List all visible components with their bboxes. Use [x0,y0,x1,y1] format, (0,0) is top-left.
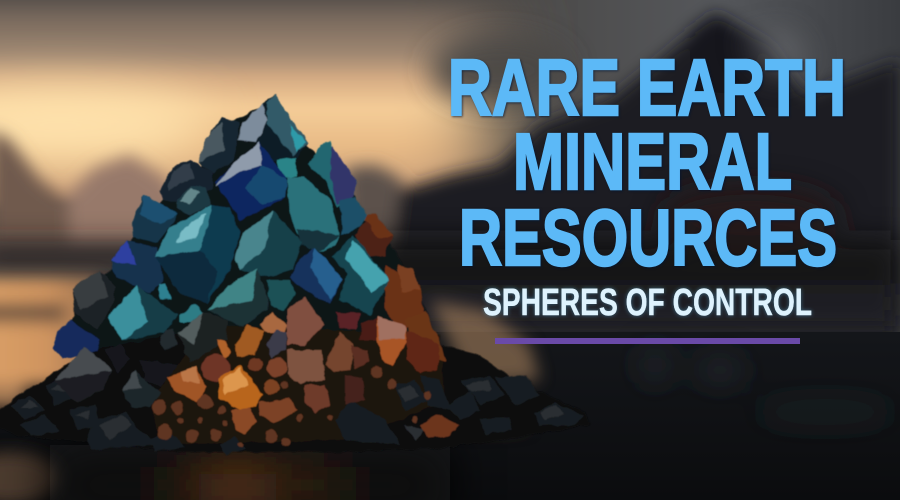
rock: dark grey left [72,270,115,330]
rock: large teal right of centre [287,177,340,252]
rock: teal right with violet side [308,142,356,208]
rock: mid teal [207,268,268,327]
rock: blue faceted [290,247,343,303]
rock: bright teal right [332,235,390,315]
black rock rubble base [0,325,590,455]
rock: blue left [132,195,178,243]
rock: dark grey foreground [55,347,112,403]
rock: blue centre crystal [215,142,287,220]
rock: teal left large [107,285,178,340]
mineral pile [0,95,590,455]
purple divider line [495,338,800,344]
rock: small grey teal [177,185,212,215]
brown and rust rocks at the right edge [355,214,445,360]
title: Rare Earth Mineral Resources [448,43,846,282]
title: Rare Earth Mineral Resources: MINERAL [513,117,792,206]
rock: grey middle [178,312,228,363]
rock: dark cluster left [160,160,213,203]
teal and blue crystal rocks [53,95,390,407]
rock: small blue right [340,198,368,235]
rock: summit crystal [238,95,308,163]
rock: violet blue left [110,240,163,293]
rock: largest teal crystal [155,205,240,303]
dark underlay between rocks [62,100,440,355]
reflection of the mineral pile in the water [50,445,450,500]
orange copper ore rocks [152,297,460,448]
rock: navy low left [53,320,100,360]
rock: dark upper left [197,117,240,173]
rock: centre teal [235,210,302,277]
rock: small teal [278,157,297,178]
